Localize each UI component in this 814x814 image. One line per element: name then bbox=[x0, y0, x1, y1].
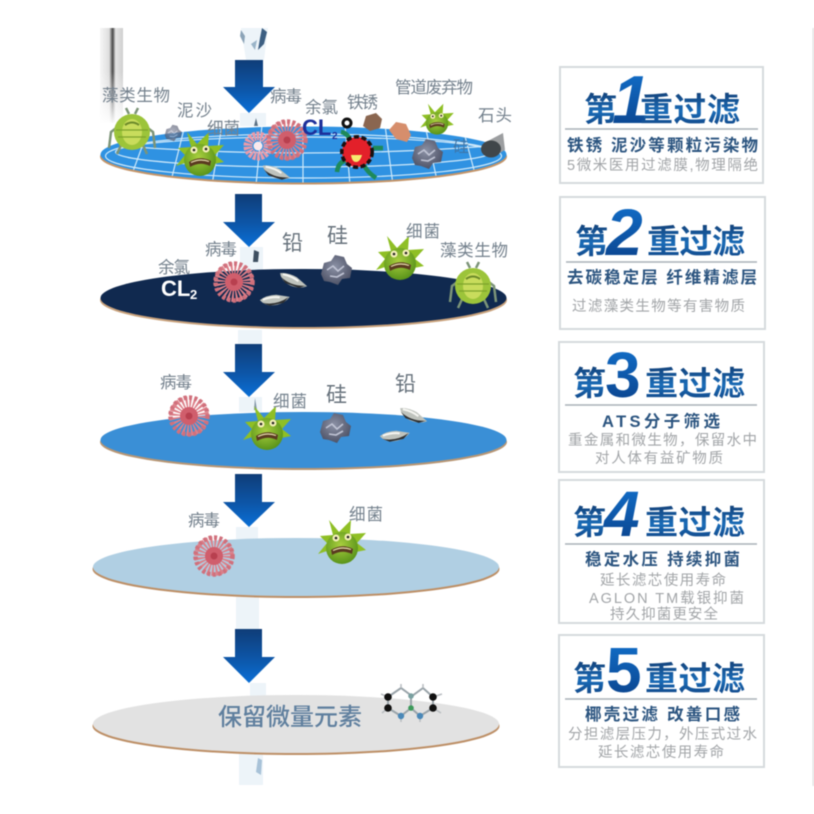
filter layer 3 bbox=[100, 373, 507, 470]
virus bbox=[196, 538, 232, 574]
labels: 2 bbox=[332, 131, 338, 142]
panel: stage 5: 延长滤芯使用寿命 bbox=[598, 743, 724, 761]
labels: 铁锈 bbox=[347, 93, 378, 112]
bacterium bbox=[318, 520, 366, 564]
retained elements label: 保留微量元素 bbox=[218, 704, 362, 731]
small stone bbox=[165, 125, 182, 141]
disc 4 bbox=[92, 538, 500, 598]
labels: 藻类生物 bbox=[102, 86, 170, 105]
panel: stage 5 bbox=[559, 634, 764, 767]
dark stone bbox=[481, 133, 505, 158]
panel: stage 5: 第 bbox=[573, 660, 606, 697]
panel: stage 1: 铁锈 泥沙等颗粒污染物 bbox=[567, 135, 758, 155]
panel: stage 4: 重过滤 bbox=[645, 504, 745, 541]
filter layer 2 bbox=[100, 222, 508, 329]
labels bbox=[160, 373, 416, 411]
labels: 细菌 bbox=[207, 119, 240, 138]
labels: 管道废弃物 bbox=[395, 78, 473, 97]
labels: 硅 bbox=[326, 384, 347, 407]
labels: 泥沙 bbox=[177, 101, 212, 120]
panel: stage 3: 对人体有益矿物质 bbox=[595, 450, 723, 467]
bacterium bbox=[243, 406, 291, 450]
arrow 5 bbox=[223, 629, 275, 683]
panel: stage 4: AGLON TM载银抑菌 bbox=[589, 590, 744, 607]
lead pellets bbox=[379, 405, 429, 443]
labels: 余氯 bbox=[158, 258, 190, 277]
panel: stage 4: 延长滤芯使用寿命 bbox=[600, 571, 726, 589]
bacterium bbox=[376, 236, 424, 280]
labels: 藻类生物 bbox=[440, 241, 508, 260]
filter layer 4 bbox=[92, 505, 500, 598]
disc 1 bbox=[100, 125, 507, 185]
panel: stage 2: 第 bbox=[575, 223, 608, 260]
disc 2 bbox=[100, 269, 507, 329]
gray rock bbox=[412, 139, 443, 169]
panel: stage 4 bbox=[559, 478, 764, 623]
panel: stage 4: 4 bbox=[602, 478, 640, 550]
algae bbox=[109, 108, 155, 154]
arrow 2 bbox=[223, 194, 275, 247]
algae bbox=[450, 262, 496, 308]
panel: stage 2: 去碳稳定层 纤维精滤层 bbox=[567, 267, 757, 287]
labels: 细菌 bbox=[273, 392, 307, 411]
panel: stage 3: 3 bbox=[605, 339, 641, 411]
panel: stage 3: 重金属和微生物，保留水中 bbox=[568, 432, 757, 449]
labels: 细菌 bbox=[349, 505, 383, 524]
labels: CL bbox=[161, 276, 190, 301]
bacterium bbox=[176, 132, 224, 176]
panel: stage 5: 分担滤层压力，外压式过水 bbox=[568, 726, 758, 743]
orange rock bbox=[389, 122, 411, 142]
black ring bbox=[343, 119, 351, 127]
silicon rock bbox=[321, 255, 352, 285]
red germ mascot bbox=[337, 132, 383, 178]
lead pellets bbox=[259, 270, 309, 307]
panel: stage 3 bbox=[559, 339, 764, 472]
rust rock bbox=[363, 113, 382, 131]
small green bacterium bbox=[420, 104, 454, 135]
panel: stage 1 bbox=[560, 62, 763, 183]
panel: stage 1: 1 bbox=[612, 62, 650, 138]
arrow 4 bbox=[223, 474, 275, 527]
labels: CL bbox=[302, 115, 331, 140]
panel: stage 5: 椰壳过滤 改善口感 bbox=[585, 704, 740, 724]
panel: stage 2 bbox=[560, 195, 765, 329]
labels: 硅 bbox=[453, 138, 469, 156]
panel: stage 4: 第 bbox=[573, 504, 606, 541]
virus bbox=[170, 398, 208, 434]
labels bbox=[188, 505, 383, 530]
labels: 铅 bbox=[395, 373, 416, 396]
disc 3 bbox=[100, 412, 507, 470]
lead pellet bbox=[260, 163, 292, 183]
labels: 石头 bbox=[478, 106, 512, 125]
labels: 细菌 bbox=[406, 222, 440, 241]
labels bbox=[102, 78, 512, 156]
labels: 铅 bbox=[282, 232, 303, 255]
water stream bbox=[236, 28, 268, 785]
panel: stage 2: 过滤藻类生物等有害物质 bbox=[572, 297, 745, 315]
labels bbox=[158, 222, 508, 302]
faucet pipe bbox=[100, 28, 123, 125]
panel: stage 4: 稳定水压 持续抑菌 bbox=[585, 549, 740, 569]
panel: stage 1: 第 bbox=[584, 91, 617, 128]
virus bbox=[216, 264, 252, 300]
arrow 3 bbox=[223, 344, 275, 397]
filter layer 5 bbox=[92, 684, 500, 755]
labels: 病毒 bbox=[188, 511, 220, 530]
pink ring virus bbox=[248, 136, 268, 156]
silicon rock bbox=[320, 413, 351, 443]
disc 5 bbox=[92, 695, 500, 755]
virus bbox=[268, 122, 306, 158]
icon: molecule bbox=[381, 684, 442, 722]
panel: stage 1: 5微米医用过滤膜,物理隔绝 bbox=[567, 157, 758, 174]
panel: stage 5: 重过滤 bbox=[645, 660, 745, 697]
panel: stage 3: 重过滤 bbox=[645, 365, 745, 402]
panel: stage 2: 2 bbox=[604, 195, 643, 269]
labels: 余氯 bbox=[305, 98, 338, 117]
panel: stage 3: 第 bbox=[573, 365, 606, 402]
panel: stage 4: 持久抑菌更安全 bbox=[610, 605, 718, 623]
filter layer 1 bbox=[100, 78, 512, 185]
panel: stage 3: ATS分子筛选 bbox=[602, 411, 720, 431]
labels: 病毒 bbox=[270, 87, 302, 106]
panel: stage 5: 5 bbox=[606, 634, 642, 706]
arrow 1 bbox=[223, 60, 275, 113]
labels: 硅 bbox=[327, 225, 348, 248]
panel: stage 1: 重过滤 bbox=[640, 91, 740, 128]
labels: 病毒 bbox=[205, 240, 237, 259]
panel: stage 2: 重过滤 bbox=[647, 223, 745, 260]
right edge line bbox=[812, 28, 814, 786]
labels: 病毒 bbox=[160, 373, 192, 392]
labels: 2 bbox=[190, 287, 197, 302]
